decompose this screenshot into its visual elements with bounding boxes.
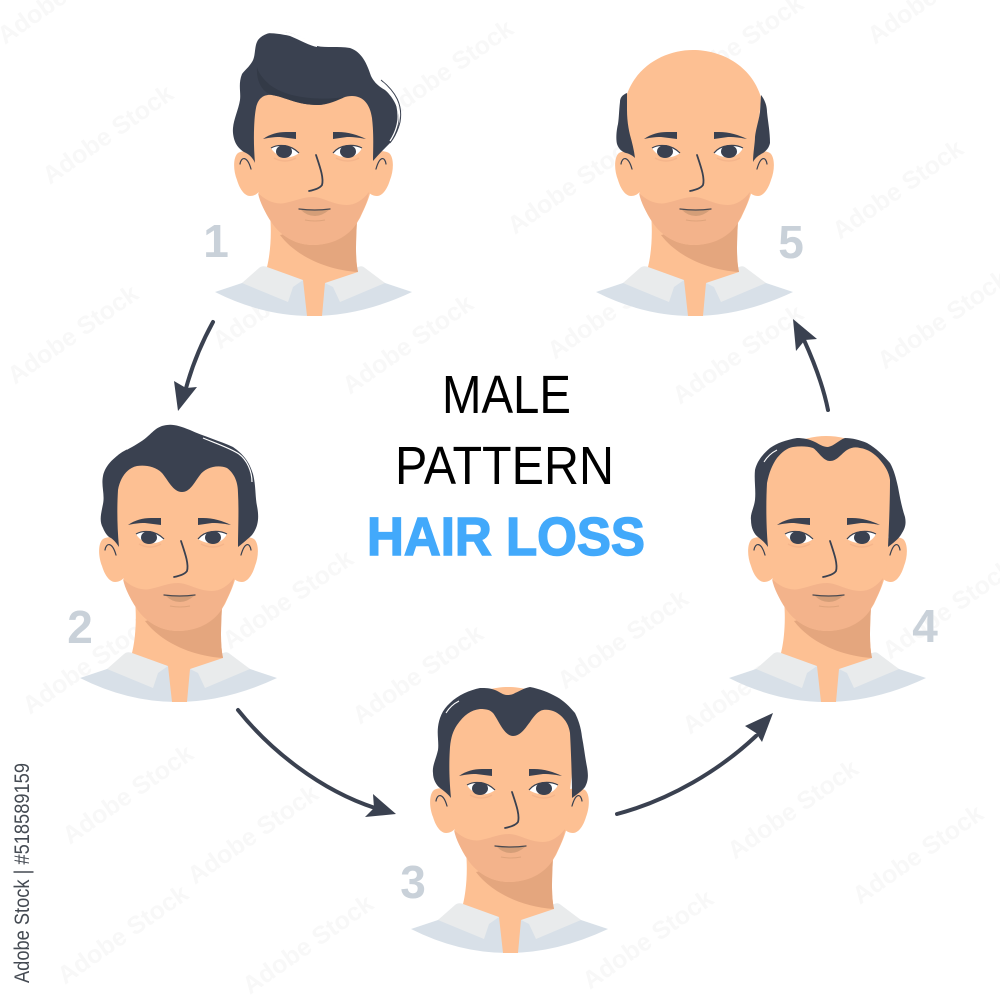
watermark: Adobe Stock: [37, 79, 179, 190]
hair: full head: [233, 31, 401, 163]
number 5: 5: [778, 216, 804, 268]
watermark: Adobe Stock: [377, 14, 519, 125]
watermark: Adobe Stock: [347, 619, 489, 730]
watermark: Adobe Stock: [827, 134, 969, 245]
watermark: Adobe Stock: [577, 884, 719, 995]
hair: thin receded band: [751, 438, 906, 547]
watermark: Adobe Stock: [847, 799, 989, 910]
face 2: slight recession: [80, 425, 277, 702]
arrow 4 to 5: [793, 319, 828, 410]
number 4: 4: [912, 600, 938, 652]
watermark: Adobe Stock: [52, 879, 194, 990]
watermark: Adobe Stock: [182, 779, 324, 890]
side credit: Adobe Stock | #518589159: [11, 763, 34, 983]
watermark: Adobe Stock: [722, 754, 864, 865]
title line: male: MALE: [442, 365, 571, 425]
watermark: Adobe Stock: [542, 254, 684, 365]
watermark: Adobe Stock: [677, 629, 819, 740]
watermark: Adobe Stock: [667, 299, 809, 410]
watermark: Adobe Stock: [337, 289, 479, 400]
hair: receding temples: [101, 425, 258, 547]
watermark: Adobe Stock: [237, 889, 379, 998]
number 2: 2: [67, 601, 93, 653]
title line: pattern: PATTERN: [395, 436, 614, 496]
watermark: Adobe Stock: [2, 279, 144, 390]
arrow 2 to 3: [238, 710, 396, 817]
watermark: Adobe Stock: [17, 609, 159, 720]
number 1: 1: [203, 215, 229, 267]
number 3: 3: [400, 856, 426, 908]
face 5: bald: [596, 50, 793, 316]
face 4: thin hair band: [729, 436, 926, 702]
watermark: Adobe Stock: [207, 244, 349, 355]
face 1: full hair: [215, 31, 412, 316]
hair: deeper recession: [433, 687, 588, 798]
watermark: Adobe Stock: [552, 584, 694, 695]
arrow 3 to 4: [617, 713, 773, 814]
watermark: Adobe Stock: [57, 739, 199, 850]
watermark: Adobe Stock: [217, 544, 359, 655]
watermark: Adobe Stock: [502, 129, 644, 240]
face 3: crown thinning: [411, 687, 608, 953]
title line: hair loss: HAIR LOSS: [367, 507, 645, 567]
arrow 1 to 2: [174, 322, 213, 411]
hair: side patches: [616, 93, 770, 162]
title: [367, 365, 645, 567]
